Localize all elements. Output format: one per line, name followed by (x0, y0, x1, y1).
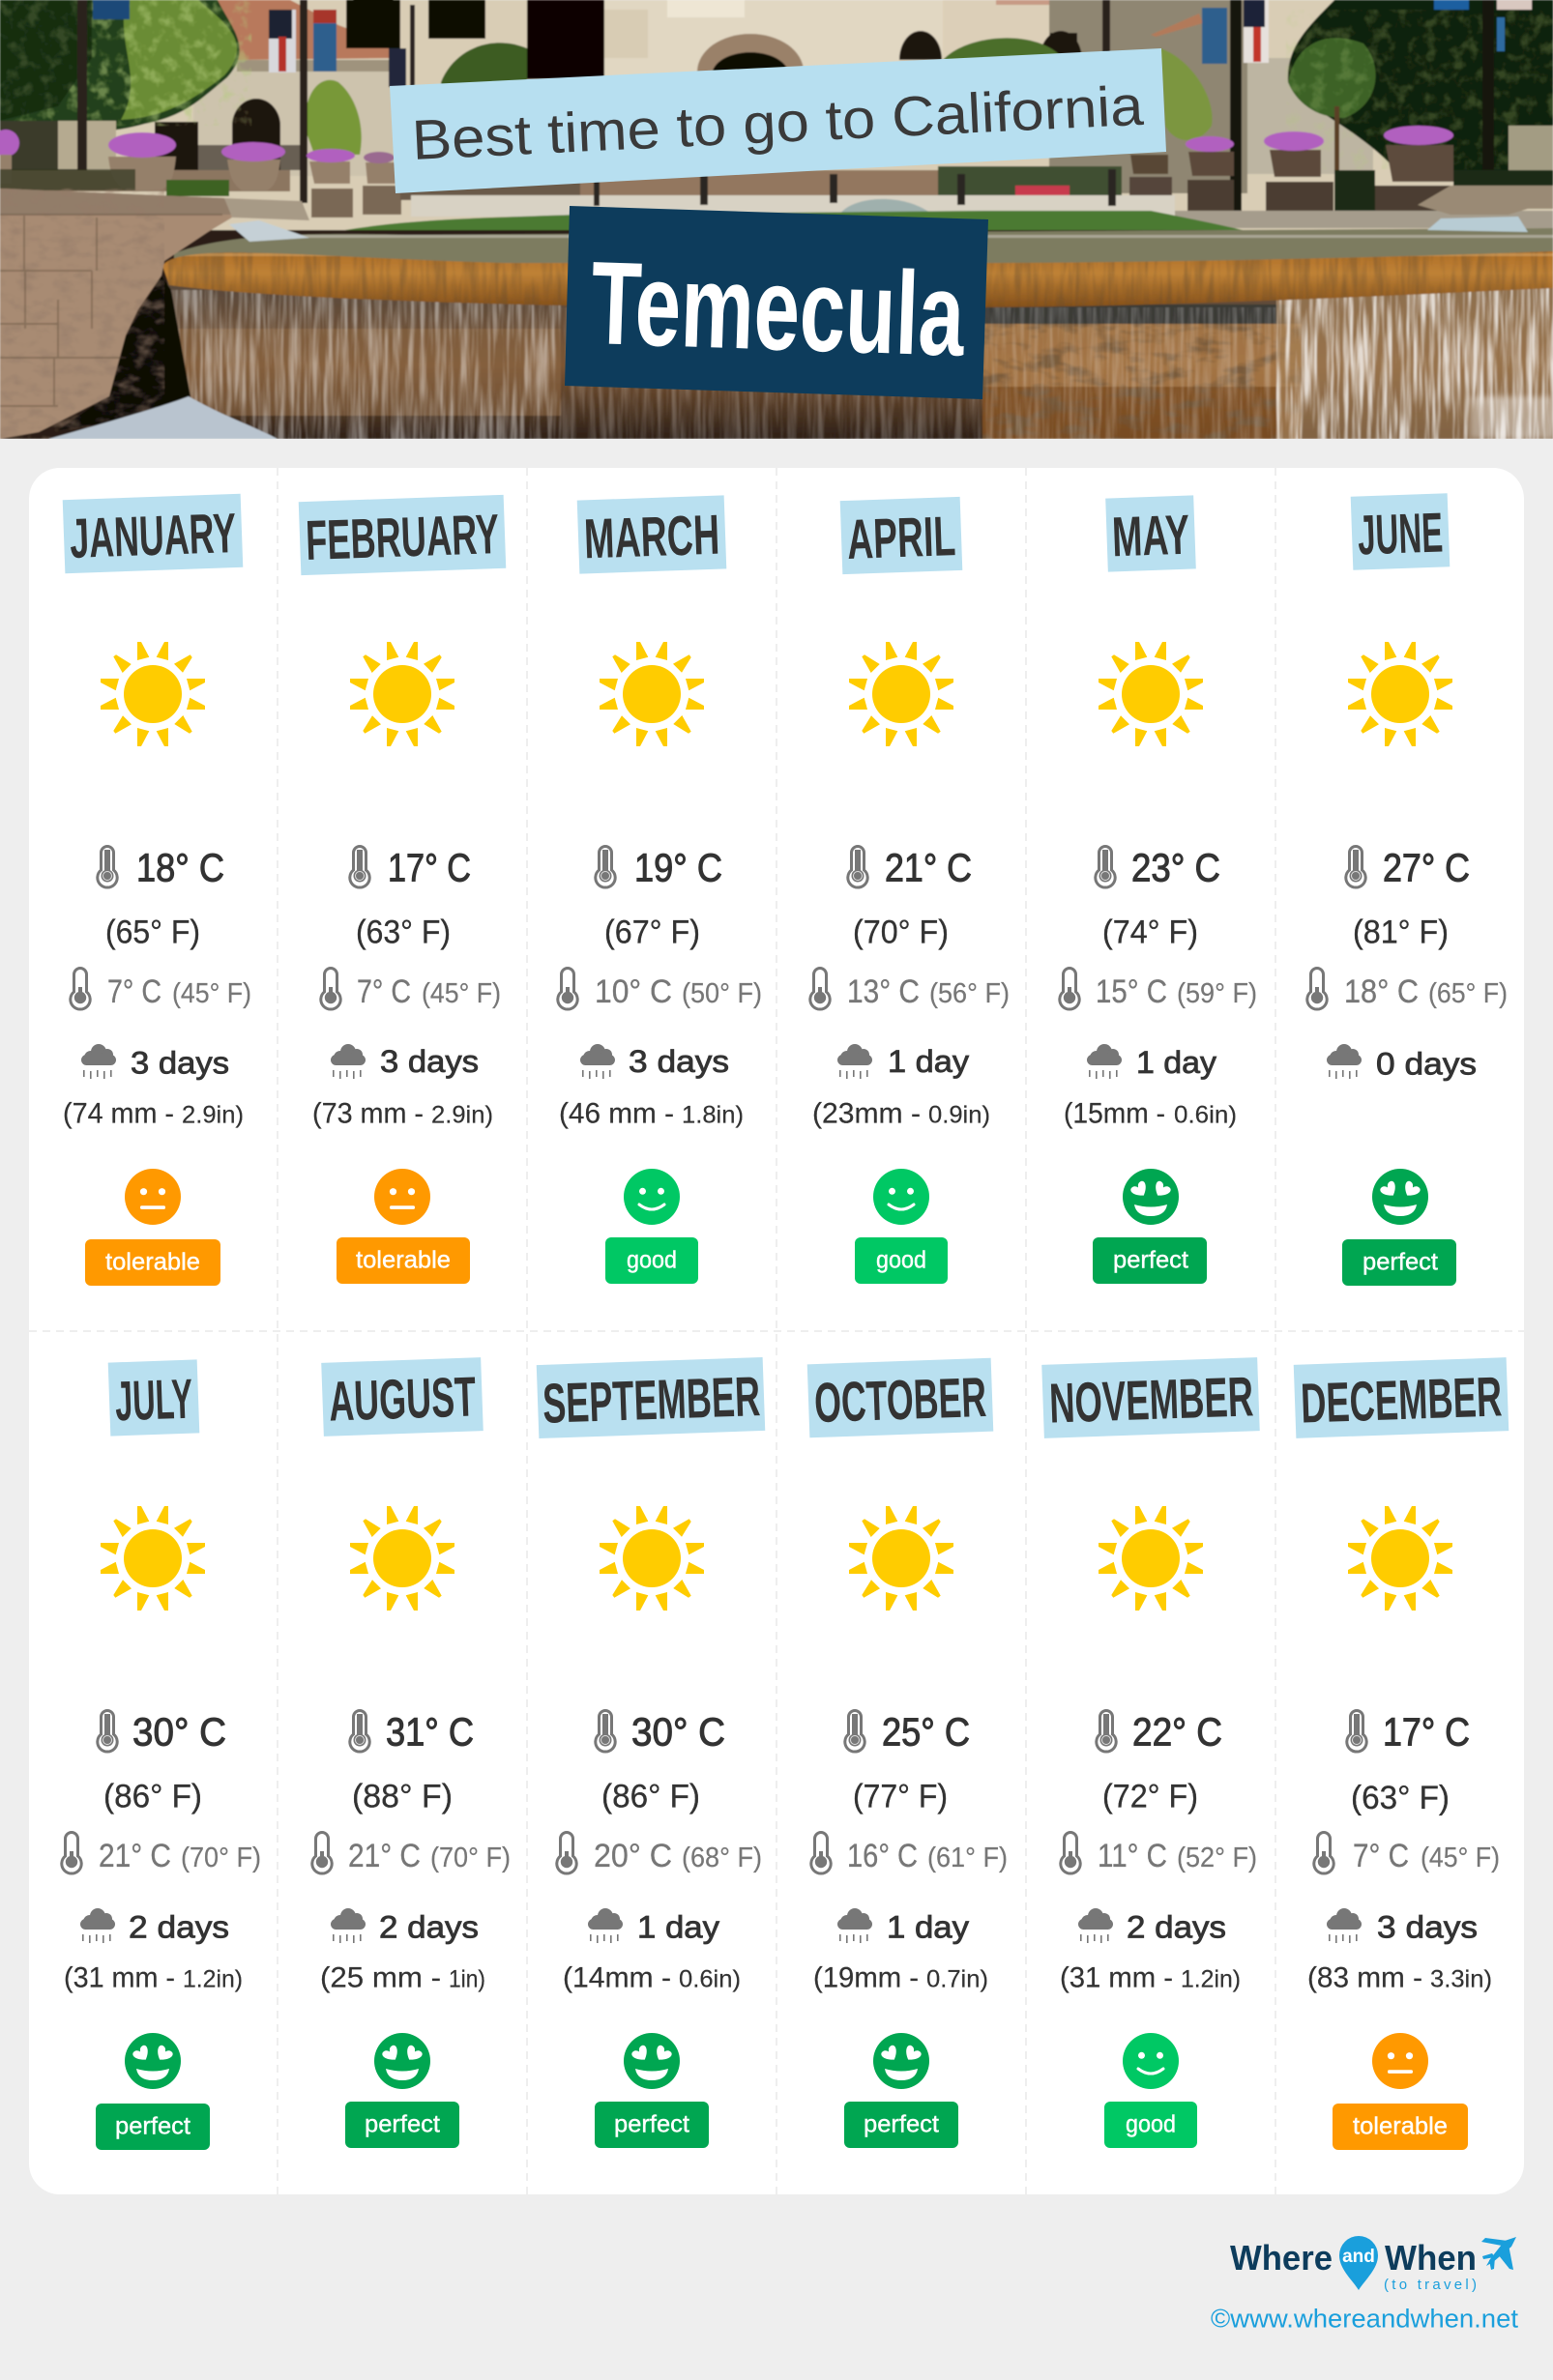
rating badge: perfect (1113, 1247, 1188, 1274)
icon: sun (101, 642, 205, 746)
rainfall: 1 day (637, 1910, 719, 1945)
low temperature: 7° C (357, 973, 411, 1010)
icon: heart-eyes face (624, 2033, 680, 2089)
low temperature: (45° F) (172, 978, 251, 1009)
high temperature (350, 1710, 474, 1815)
icon: map pin (1339, 2236, 1378, 2290)
icon: heart-eyes face (374, 2033, 430, 2089)
rainfall: (25 mm - (320, 1962, 441, 1994)
high temperature: 18° C (136, 846, 224, 890)
low temperature: (70° F) (181, 1843, 261, 1873)
rating badge (337, 1237, 470, 1284)
rating badge: good (627, 1247, 677, 1274)
rainfall: (14mm - (563, 1962, 671, 1994)
month heading (840, 497, 962, 574)
icon: neutral face (374, 1169, 430, 1225)
logo: Where and When (1230, 2236, 1516, 2293)
icon: sun (1348, 642, 1452, 746)
low temperature: (68° F) (682, 1843, 762, 1873)
panel: june (1307, 493, 1508, 1286)
rainfall: (31 mm - (64, 1962, 175, 1994)
low temperature: (61° F) (927, 1843, 1008, 1873)
rating badge (96, 2104, 210, 2150)
city name text: Temecula (589, 237, 967, 381)
rating badge (85, 1239, 220, 1286)
rainfall (1060, 1908, 1241, 1994)
low temperature (557, 1833, 762, 1874)
rainfall: 0 days (1376, 1047, 1477, 1082)
high temperature: (65° F) (105, 914, 200, 951)
stairs and plaza (400, 166, 1553, 232)
rainfall: (15mm - (1064, 1098, 1165, 1130)
low temperature: 20° C (594, 1838, 672, 1874)
rating badge (1093, 1237, 1207, 1284)
low temperature: 7° C (107, 973, 161, 1010)
rating badge (1342, 1239, 1456, 1286)
panel: december (1294, 1357, 1509, 2150)
icon: heart-eyes face (1372, 1169, 1428, 1225)
panel: march (558, 495, 762, 1284)
panel: august (312, 1357, 511, 2148)
rainfall: 1.2in) (183, 1966, 243, 1993)
low temperature: (45° F) (1421, 1843, 1500, 1873)
high temperature: (74° F) (1102, 914, 1198, 951)
rainfall (1064, 1044, 1237, 1130)
month heading: OCTOBER (813, 1366, 987, 1435)
month heading: NOVEMBER (1048, 1365, 1254, 1436)
icon: neutral face (1372, 2033, 1428, 2089)
high temperature: 17° C (1383, 1710, 1470, 1755)
rating badge: perfect (365, 2111, 440, 2138)
month heading: JANUARY (69, 502, 237, 570)
panel: april (810, 497, 1010, 1284)
title text: Best time to go to California (411, 74, 1146, 172)
high temperature: 27° C (1383, 846, 1470, 890)
high temperature: (77° F) (853, 1779, 948, 1815)
icon: sun (350, 642, 454, 746)
fountain rim (162, 251, 1553, 308)
month heading: APRIL (846, 505, 956, 571)
month heading (807, 1358, 993, 1437)
rainfall: 2 days (1127, 1910, 1226, 1945)
rainfall: 3 days (629, 1044, 729, 1079)
high temperature: (88° F) (352, 1779, 453, 1815)
month heading (299, 495, 506, 575)
poles and banners (77, 0, 1532, 220)
icon: sun (600, 1506, 704, 1611)
icon: airplane (1481, 2237, 1516, 2270)
panel: may (1060, 495, 1257, 1284)
month heading (1351, 493, 1450, 570)
low temperature (1307, 969, 1508, 1010)
high temperature: (63° F) (356, 914, 451, 951)
icon: sun (101, 1506, 205, 1611)
rainfall (812, 1044, 990, 1130)
rainfall: (83 mm - (1307, 1962, 1422, 1994)
icon: sun (1348, 1506, 1452, 1611)
month heading (108, 1359, 199, 1437)
rating badge: perfect (864, 2111, 939, 2138)
month heading: AUGUST (328, 1365, 477, 1434)
high temperature (98, 846, 224, 951)
high temperature: (86° F) (103, 1779, 202, 1815)
low temperature: 16° C (847, 1838, 918, 1874)
panel: february (299, 495, 506, 1284)
low temperature: (52° F) (1177, 1843, 1257, 1873)
high temperature: (63° F) (1351, 1780, 1450, 1816)
rainfall (563, 1908, 741, 1994)
low temperature (321, 969, 501, 1010)
rainfall (320, 1908, 485, 1994)
high temperature: 25° C (882, 1710, 970, 1755)
stone wall (0, 169, 1553, 439)
low temperature: 21° C (348, 1838, 421, 1874)
fountain pool water (0, 228, 1553, 439)
low temperature: (65° F) (1428, 978, 1508, 1009)
waterfall wall (166, 276, 1553, 439)
lawn (346, 210, 1242, 232)
month heading (537, 1357, 765, 1438)
high temperature: (67° F) (604, 914, 700, 951)
low temperature (1060, 969, 1257, 1010)
month heading: SEPTEMBER (542, 1365, 761, 1436)
rainfall (813, 1908, 988, 1994)
month heading: FEBRUARY (305, 503, 500, 572)
building facade (0, 0, 1553, 232)
low temperature: 18° C (1344, 973, 1419, 1010)
rainfall (559, 1044, 744, 1130)
icon: sun (1099, 1506, 1203, 1611)
panel: october (807, 1358, 1008, 2148)
rainfall: 3.3in) (1430, 1966, 1492, 1993)
high temperature: (81° F) (1353, 914, 1449, 951)
rainfall: 0.9in) (928, 1102, 990, 1129)
low temperature: (56° F) (929, 978, 1010, 1009)
rainfall: (23mm - (812, 1098, 921, 1130)
low temperature: 7° C (1353, 1838, 1409, 1874)
rating badge: perfect (115, 2113, 190, 2140)
icon: smiling face (1123, 2033, 1179, 2089)
logo: Where and When: (to travel) (1384, 2277, 1477, 2293)
rainfall: 1.2in) (1181, 1966, 1241, 1993)
rainfall: 1 day (1136, 1045, 1216, 1080)
high temperature: 30° C (132, 1710, 226, 1755)
low temperature (62, 1833, 261, 1874)
high temperature (845, 1710, 970, 1815)
rainfall: (46 mm - (559, 1098, 674, 1130)
icon: heart-eyes face (1123, 1169, 1179, 1225)
rainfall (1327, 1044, 1477, 1082)
icon: smiling face (624, 1169, 680, 1225)
rainfall: (31 mm - (1060, 1962, 1173, 1994)
rainfall: (73 mm - (312, 1098, 424, 1130)
high temperature (1346, 846, 1470, 951)
high temperature: (86° F) (601, 1779, 700, 1815)
low temperature: 13° C (847, 973, 920, 1010)
icon: sun (350, 1506, 454, 1611)
rainfall: 0.6in) (1174, 1102, 1237, 1129)
rainfall: 1.8in) (682, 1102, 744, 1129)
icon: sun (849, 1506, 953, 1611)
month heading (63, 494, 243, 573)
rainfall: 0.7in) (926, 1966, 988, 1993)
panel: september (537, 1357, 765, 2148)
icon: heart-eyes face (125, 2033, 181, 2089)
high temperature: 22° C (1132, 1710, 1222, 1755)
rainfall: 0.6in) (679, 1966, 741, 1993)
rating badge (844, 2102, 958, 2148)
low temperature: 21° C (99, 1838, 171, 1874)
high temperature: 30° C (631, 1710, 725, 1755)
rating badge (605, 1237, 698, 1284)
low temperature (1061, 1833, 1257, 1874)
rating badge: perfect (614, 2111, 689, 2138)
month heading: MARCH (583, 504, 720, 570)
rating badge: good (876, 1247, 926, 1274)
icon: heart-eyes face (873, 2033, 929, 2089)
icon: neutral face (125, 1169, 181, 1225)
icon: map pin: and (1342, 2247, 1375, 2267)
month heading: JUNE (1357, 501, 1444, 567)
rainfall (63, 1044, 244, 1130)
high temperature: (70° F) (853, 914, 949, 951)
low temperature (811, 1833, 1008, 1874)
panel: november (1041, 1357, 1260, 2148)
low temperature (312, 1833, 511, 1874)
rainfall (312, 1044, 493, 1130)
rating badge (1104, 2102, 1197, 2148)
low temperature: (50° F) (682, 978, 762, 1009)
title banner (390, 48, 1166, 193)
rainfall: 3 days (1377, 1910, 1478, 1945)
city name banner (565, 206, 988, 399)
low temperature (1314, 1833, 1500, 1874)
rating badge: good (1126, 2111, 1176, 2138)
icon: sun (1099, 642, 1203, 746)
low temperature: (45° F) (422, 978, 501, 1009)
rainfall: 3 days (131, 1046, 229, 1081)
high temperature (1347, 1710, 1470, 1816)
rainfall: 3 days (380, 1044, 479, 1079)
rainfall: (19mm - (813, 1962, 919, 1994)
rating badge (855, 1237, 948, 1284)
rating badge: perfect (1363, 1249, 1438, 1276)
rainfall: 2 days (129, 1910, 229, 1945)
high temperature (596, 846, 722, 951)
rating badge (345, 2102, 459, 2148)
rainfall: 2.9in) (431, 1102, 493, 1129)
high temperature (350, 846, 471, 951)
icon: sun (600, 642, 704, 746)
high temperature (1097, 1710, 1222, 1815)
rating badge: tolerable (1353, 2113, 1448, 2140)
low temperature: 15° C (1096, 973, 1167, 1010)
trees (0, 0, 1553, 180)
high temperature: (72° F) (1102, 1779, 1198, 1815)
panel: july (62, 1359, 261, 2150)
high temperature: 31° C (386, 1710, 474, 1755)
high temperature (848, 846, 972, 951)
rainfall: 2 days (379, 1910, 479, 1945)
rainfall (1307, 1908, 1492, 1994)
low temperature: (59° F) (1177, 978, 1257, 1009)
rainfall: 2.9in) (182, 1102, 244, 1129)
month heading (321, 1357, 483, 1437)
header photo: Temecula fountain (0, 0, 1553, 439)
month heading (1041, 1357, 1260, 1438)
low temperature: (70° F) (430, 1843, 511, 1873)
rating badge: tolerable (105, 1249, 200, 1276)
high temperature: 21° C (885, 846, 972, 890)
website credit: ©www.whereandwhen.net (1211, 2305, 1518, 2334)
rating badge (1333, 2104, 1468, 2150)
high temperature (596, 1710, 725, 1815)
month heading (577, 495, 726, 574)
planters with purple flowers (0, 126, 1553, 228)
icon: sun (849, 642, 953, 746)
low temperature (71, 969, 251, 1010)
logo: Where and When: When (1385, 2238, 1477, 2278)
month heading: MAY (1111, 504, 1190, 568)
high temperature (98, 1710, 226, 1815)
rainfall: 1 day (887, 1910, 969, 1945)
low temperature (810, 969, 1010, 1010)
rainfall: 1 day (888, 1044, 969, 1079)
month heading (1105, 495, 1196, 572)
month heading: JULY (114, 1368, 193, 1433)
panel: calendar card (29, 468, 1524, 2194)
low temperature: 11° C (1098, 1838, 1167, 1874)
high temperature: 17° C (388, 846, 471, 890)
rainfall: 1in) (449, 1966, 485, 1993)
high temperature: 23° C (1131, 846, 1220, 890)
logo: Where and When: Where (1230, 2238, 1333, 2278)
high temperature (1096, 846, 1220, 951)
rating badge (595, 2102, 709, 2148)
low temperature (558, 969, 762, 1010)
icon: smiling face (873, 1169, 929, 1225)
panel: january (63, 494, 251, 1286)
low temperature: 10° C (595, 973, 672, 1010)
rainfall (64, 1908, 243, 1994)
high temperature: 19° C (634, 846, 722, 890)
rainfall: (74 mm - (63, 1098, 174, 1130)
rating badge: tolerable (356, 1247, 451, 1274)
